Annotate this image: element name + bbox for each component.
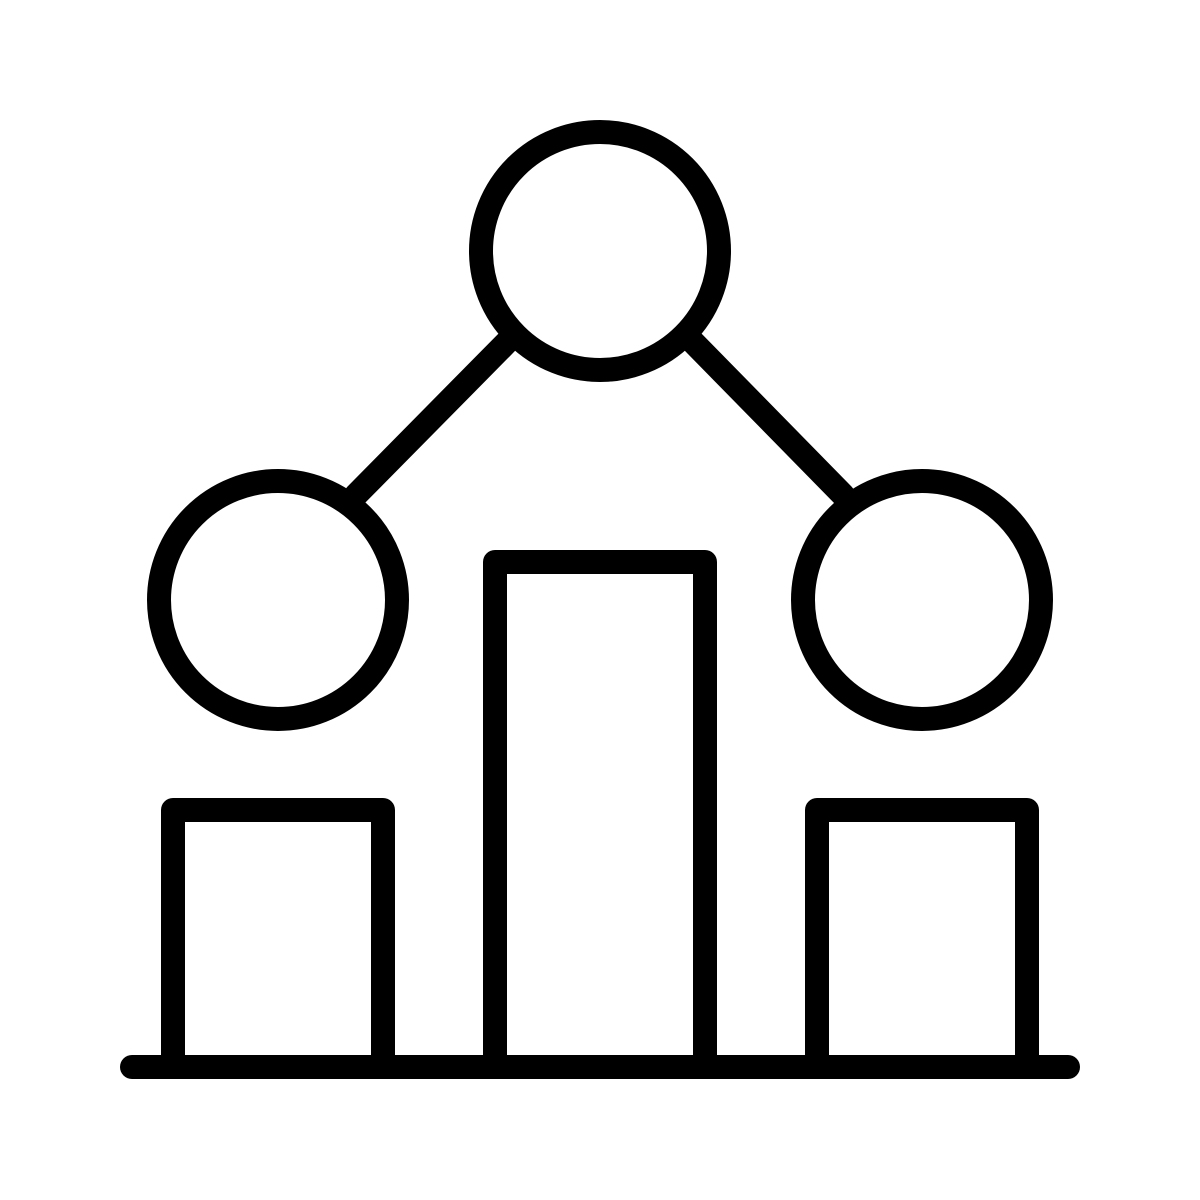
top circle node [481,132,719,370]
right circle node [803,481,1041,719]
middle bar [495,562,705,1067]
connector right [693,342,843,495]
baseline [132,1055,1068,1079]
right bar [817,810,1027,1067]
connector left [356,342,507,495]
left bar [173,810,383,1067]
left circle node [159,481,397,719]
